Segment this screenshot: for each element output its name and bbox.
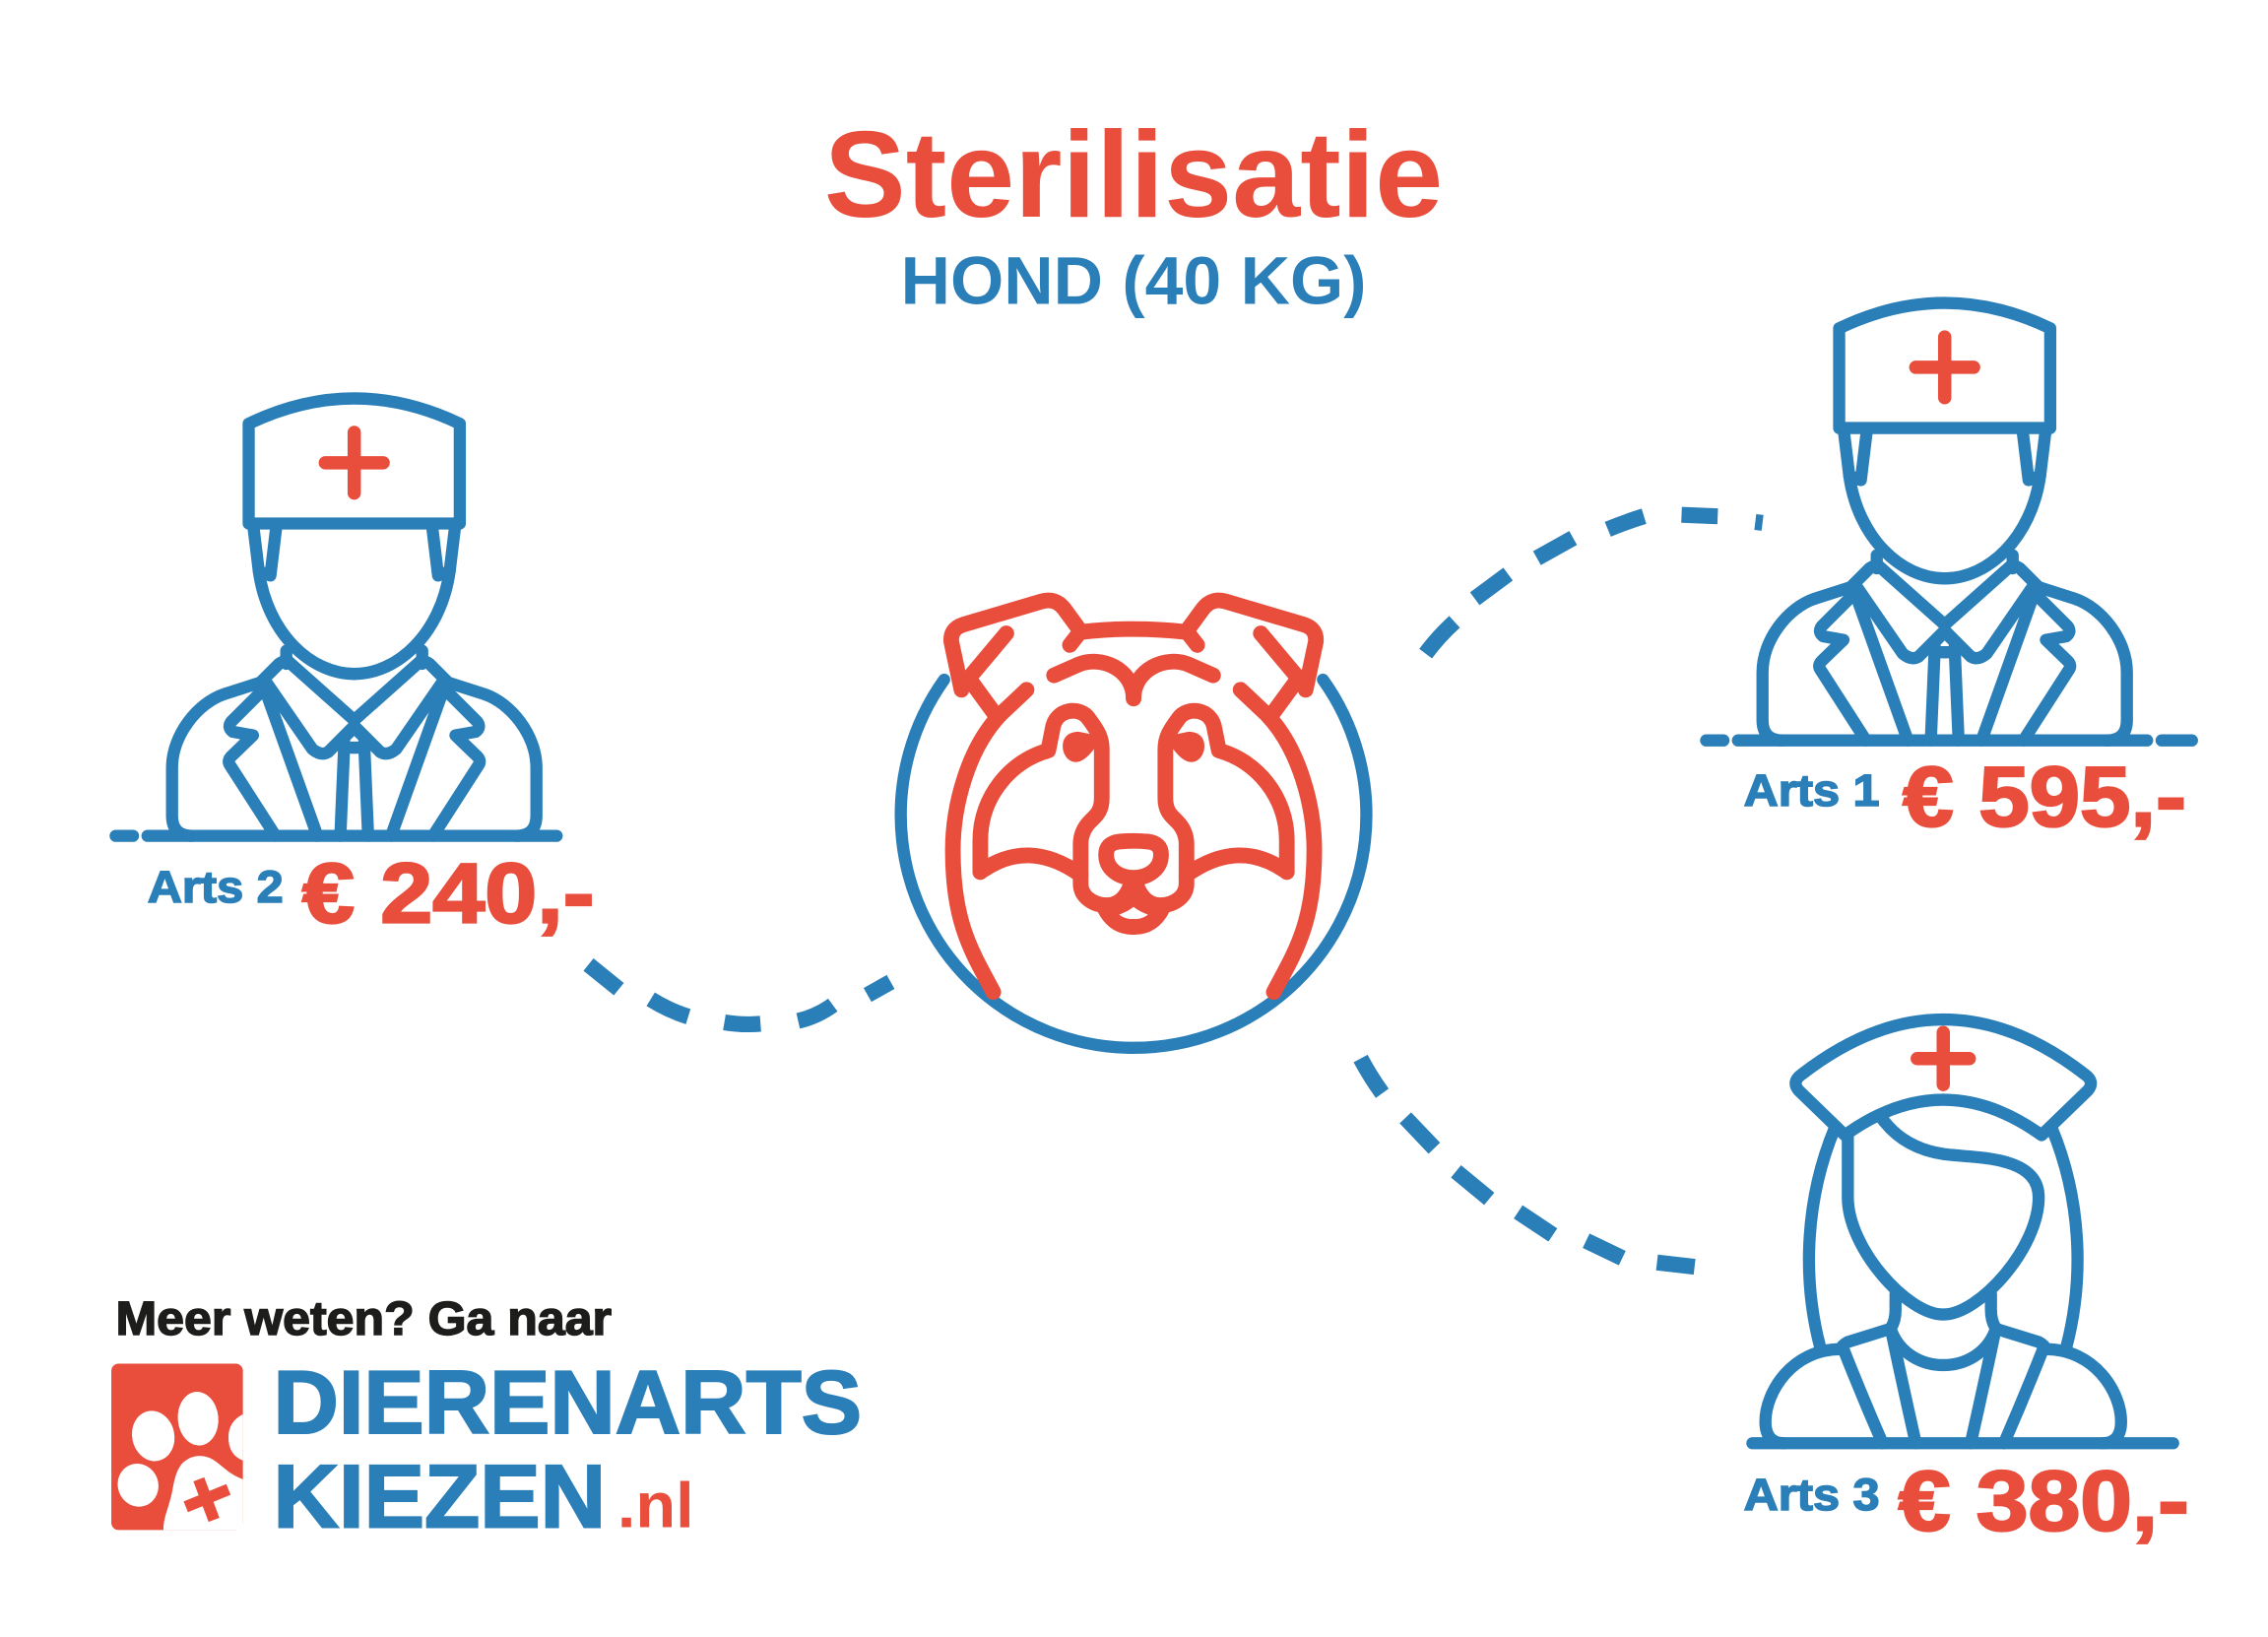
label: Arts 3: Arts 3	[1744, 1470, 1880, 1520]
logo icon	[111, 1364, 243, 1530]
call to action text: Meer weten? Ga naar	[115, 1292, 612, 1345]
subtitle: HOND (40 KG)	[901, 242, 1366, 318]
arrow: dashed line to Arts 2	[589, 964, 890, 1024]
arrow: dashed line to Arts 1	[1426, 515, 1763, 654]
logo wordmark: KIEZEN: KIEZEN	[273, 1447, 606, 1546]
blue circle arc	[901, 680, 1366, 1048]
logo wordmark: DIERENARTS: DIERENARTS	[273, 1353, 862, 1453]
arrow: dashed line to Arts 3	[1361, 1059, 1695, 1267]
nurse cap	[1795, 1019, 2091, 1136]
dash	[115, 831, 133, 840]
logo cross	[186, 1479, 228, 1520]
nurse: Arts 3	[1752, 1019, 2173, 1443]
dog head	[951, 601, 1316, 992]
title: Sterilisatie	[824, 106, 1443, 243]
logo wordmark: .nl: .nl	[617, 1470, 694, 1540]
price: Arts 1: € 595,-	[1903, 750, 2186, 844]
icon: dog in circle	[901, 601, 1366, 1048]
doctor: Arts 2	[115, 398, 556, 836]
dashes	[1706, 737, 2192, 745]
base line	[1752, 1439, 2173, 1447]
face and hair	[1847, 1119, 2039, 1315]
cap cross	[1917, 1032, 1970, 1084]
paw toes	[111, 1390, 243, 1530]
price: Arts 2: € 240,-	[302, 847, 594, 942]
label: Arts 2: Arts 2	[148, 862, 284, 912]
doctor: Arts 1	[1706, 303, 2192, 741]
neckline	[1891, 1331, 1995, 1365]
price: Arts 3: € 380,-	[1899, 1454, 2189, 1548]
label: Arts 1: Arts 1	[1744, 765, 1880, 816]
